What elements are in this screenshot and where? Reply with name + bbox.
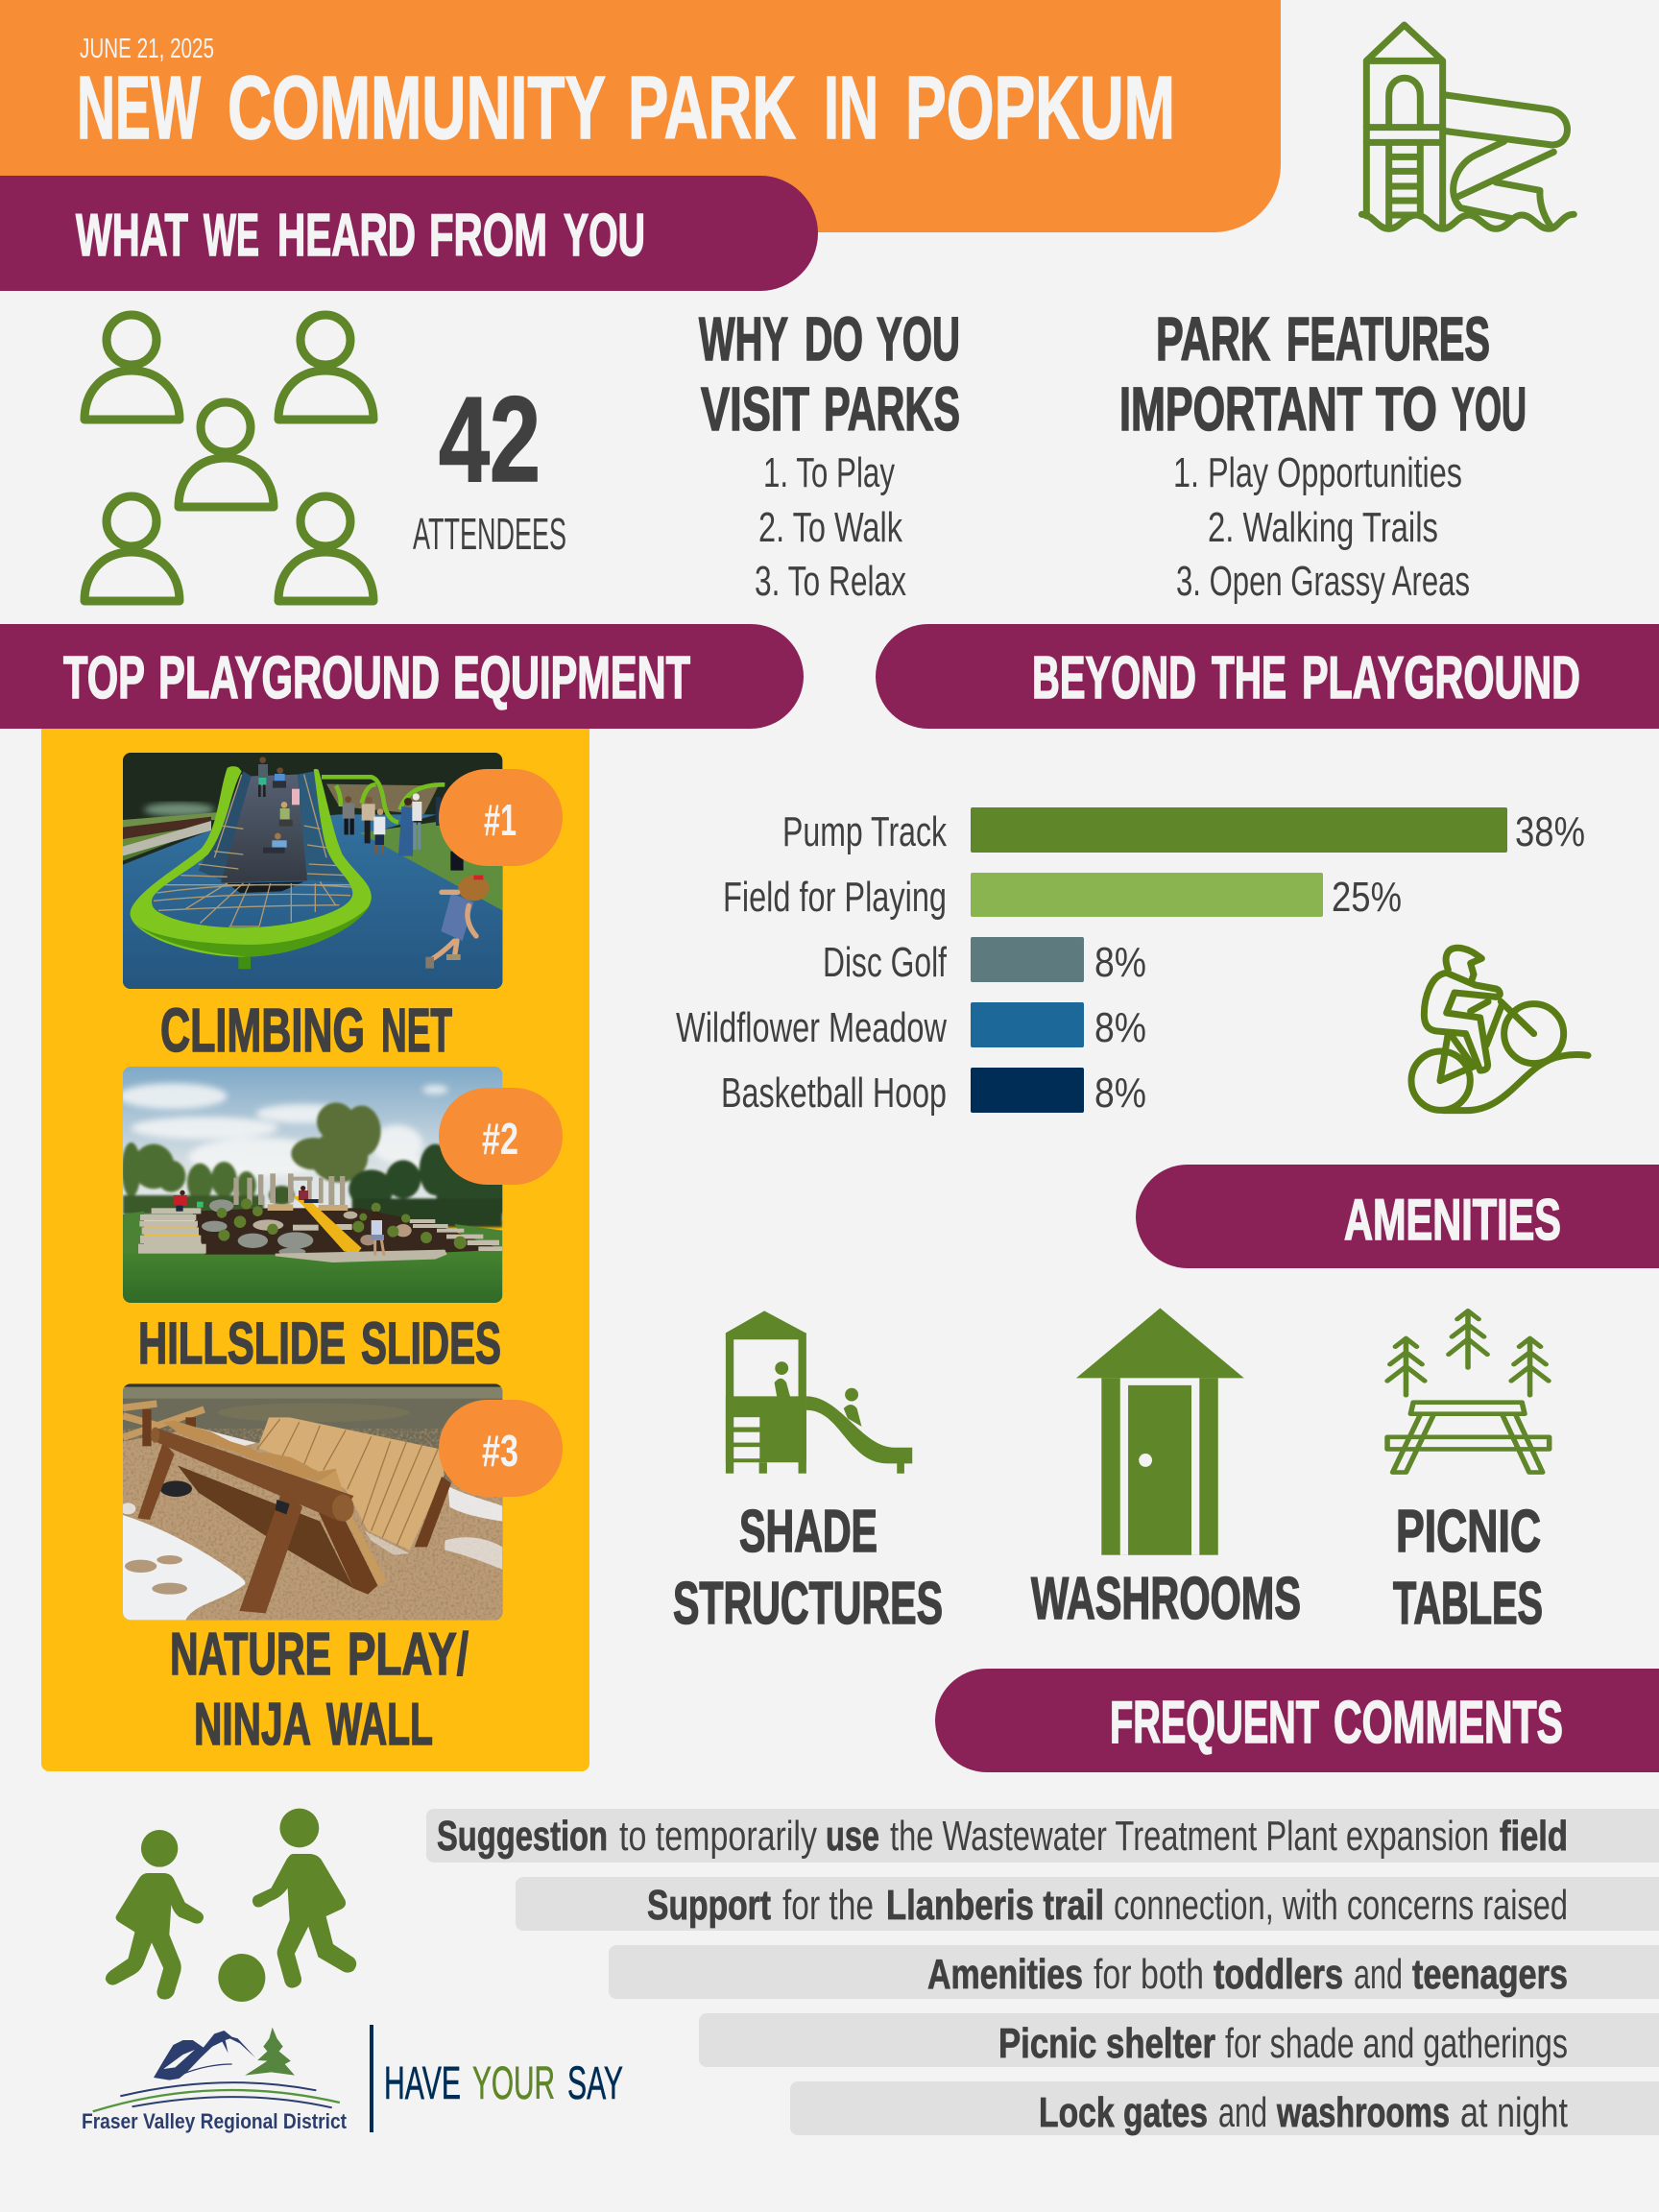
- comment 2: [516, 1877, 1659, 1931]
- section heading: amenities: AMENITIES: [1344, 1188, 1561, 1252]
- label: hillslide slides: SLIDES: [361, 1310, 501, 1376]
- badge: #2: [439, 1088, 563, 1185]
- text block: why do you visit parks: YOU: [877, 304, 960, 373]
- label: nature play ninja wall: PLAY/: [348, 1622, 469, 1688]
- text block: park features important to you: YOU: [1452, 374, 1527, 444]
- bar: basketball hoop: 8%: [1094, 1070, 1146, 1117]
- comment 3: and: [1354, 1951, 1403, 1998]
- section heading: what we heard from you: WHAT: [76, 203, 188, 269]
- badge: #3: [439, 1400, 563, 1497]
- label: picnic tables: [1393, 1499, 1543, 1637]
- bar: pump track: 38%: [1515, 808, 1585, 855]
- comment 5: Lock gates: [1039, 2089, 1208, 2136]
- bar: field for playing: [723, 873, 1402, 921]
- text block: park features important to you: 2. Walking Trails: [1208, 504, 1438, 551]
- comment 2: Llanberis trail: [886, 1882, 1104, 1929]
- attendee count: 42: [439, 372, 541, 507]
- bar: wildflower meadow: 8%: [1094, 1004, 1146, 1051]
- comment 4: Picnic shelter: [998, 2020, 1215, 2067]
- title: POPKUM: [905, 58, 1175, 157]
- have your say wordmark: SAY: [567, 2058, 623, 2109]
- section heading: what we heard from you: WE: [204, 203, 259, 269]
- icon: mountain biker: [1411, 948, 1588, 1111]
- logo: fraser valley regional district: Fraser Valley Regional District: [82, 2109, 348, 2133]
- bar: disc golf: [823, 937, 1146, 986]
- bar: pump track: [782, 807, 1585, 855]
- comment 1: to temporarily: [619, 1813, 817, 1860]
- text block: why do you visit parks: 2. To Walk: [758, 504, 903, 551]
- label: picnic tables: TABLES: [1393, 1571, 1543, 1637]
- section heading: amenities: [1136, 1165, 1659, 1268]
- section heading: what we heard from you: HEARD: [277, 203, 416, 269]
- logo: fraser valley regional district: [82, 2028, 348, 2133]
- bar: field for playing: 25%: [1332, 874, 1402, 921]
- text block: why do you visit parks: [699, 304, 960, 605]
- bar: pump track: Pump Track: [782, 808, 948, 855]
- comment 5: washrooms: [1276, 2089, 1450, 2136]
- section heading: top playground equipment: [0, 624, 804, 729]
- label: washrooms: WASHROOMS: [1031, 1566, 1301, 1632]
- section heading: beyond the playground: THE: [1212, 645, 1286, 711]
- badge: #2: #2: [482, 1114, 518, 1164]
- badge: #3: #3: [482, 1426, 518, 1476]
- photo: nature play ninja wall: [115, 1381, 509, 1625]
- title: PARK: [628, 58, 796, 157]
- text block: why do you visit parks: 1. To Play: [763, 449, 895, 496]
- text block: park features important to you: TO: [1376, 374, 1437, 444]
- section heading: frequent comments: [935, 1669, 1659, 1772]
- text block: why do you visit parks: VISIT: [701, 374, 809, 444]
- bar: basketball hoop: [721, 1068, 1146, 1117]
- section heading: what we heard from you: [0, 176, 818, 291]
- section heading: top playground equipment: PLAYGROUND: [158, 645, 440, 711]
- title: NEW: [77, 58, 201, 157]
- attendee label: ATTENDEES: [413, 509, 566, 559]
- section heading: beyond the playground: [876, 624, 1659, 729]
- icon: picnic table with trees: [1387, 1310, 1550, 1473]
- text block: park features important to you: 3. Open Grassy Areas: [1176, 558, 1470, 605]
- label: nature play ninja wall: [170, 1622, 469, 1758]
- divider: [370, 2025, 373, 2132]
- comment 2: for the: [782, 1882, 874, 1929]
- title: COMMUNITY: [228, 58, 606, 157]
- comment 3: Amenities: [927, 1951, 1083, 1998]
- text block: why do you visit parks: 3. To Relax: [755, 558, 906, 605]
- label: nature play ninja wall: NATURE: [170, 1622, 331, 1688]
- bar: disc golf: Disc Golf: [823, 939, 948, 986]
- comment 5: [790, 2081, 1659, 2136]
- badge: #1: #1: [484, 795, 517, 845]
- have your say wordmark: YOUR: [472, 2058, 555, 2109]
- comment 3: [609, 1945, 1659, 1999]
- have your say wordmark: HAVE: [384, 2058, 461, 2109]
- text block: park features important to you: 1. Play Opportunities: [1173, 449, 1462, 496]
- comment 5: at night: [1460, 2089, 1568, 2136]
- comment 1: field: [1500, 1813, 1568, 1860]
- comment 1: Suggestion: [437, 1813, 608, 1860]
- section heading: top playground equipment: TOP: [63, 645, 145, 711]
- section heading: frequent comments: FREQUENT: [1110, 1690, 1319, 1756]
- attendee icons: [84, 315, 373, 601]
- panel: top playground equipment: [0, 624, 804, 1771]
- title: IN: [824, 58, 878, 157]
- text block: park features important to you: PARK: [1156, 304, 1270, 373]
- text block: why do you visit parks: PARKS: [824, 374, 960, 444]
- date: JUNE 21, 2025: [80, 34, 214, 64]
- text block: why do you visit parks: DO: [805, 304, 863, 373]
- bar chart: beyond the playground: [676, 807, 1585, 1117]
- text block: park features important to you: FEATURES: [1286, 304, 1490, 373]
- comment 3: toddlers: [1214, 1951, 1343, 1998]
- bar: field for playing: Field for Playing: [723, 874, 947, 921]
- label: climbing net: NET: [381, 996, 452, 1065]
- comment 5: and: [1218, 2089, 1267, 2136]
- photo: climbing net: [115, 749, 509, 994]
- label: shade structures: [673, 1499, 943, 1637]
- label: picnic tables: PICNIC: [1396, 1499, 1541, 1565]
- label: climbing net: CLIMBING: [160, 996, 365, 1065]
- section heading: top playground equipment: EQUIPMENT: [453, 645, 690, 711]
- label: shade structures: SHADE: [739, 1499, 878, 1565]
- label: hillslide slides: HILLSLIDE: [138, 1310, 346, 1376]
- label: shade structures: STRUCTURES: [673, 1571, 943, 1637]
- icon: shade structure with slide: [726, 1310, 912, 1474]
- section heading: beyond the playground: BEYOND: [1032, 645, 1196, 711]
- comment 1: use: [826, 1813, 879, 1860]
- bar: wildflower meadow: Wildflower Meadow: [676, 1004, 947, 1051]
- icon: washroom building: [1076, 1309, 1244, 1555]
- comment 3: for both: [1094, 1951, 1204, 1998]
- comment 1: [426, 1809, 1659, 1863]
- comment 3: teenagers: [1412, 1951, 1568, 1998]
- label: nature play ninja wall: NINJA: [194, 1692, 311, 1758]
- comment 4: [699, 2013, 1659, 2067]
- photo: hillslide slides: [115, 1061, 509, 1304]
- bar: basketball hoop: Basketball Hoop: [721, 1070, 947, 1117]
- badge: #1: [439, 769, 563, 866]
- bar: disc golf: 8%: [1094, 939, 1146, 986]
- icon: children playing with ball: [106, 1809, 356, 2002]
- text block: park features important to you: IMPORTANT: [1119, 374, 1362, 444]
- text block: park features important to you: [1119, 304, 1527, 605]
- comment 2: Support: [647, 1882, 771, 1929]
- header banner: [0, 0, 1281, 232]
- label: nature play ninja wall: WALL: [326, 1692, 433, 1758]
- section heading: what we heard from you: FROM: [429, 203, 547, 269]
- icon: playground tower with slide: [1361, 25, 1574, 228]
- section heading: what we heard from you: YOU: [564, 203, 645, 269]
- text block: why do you visit parks: WHY: [699, 304, 788, 373]
